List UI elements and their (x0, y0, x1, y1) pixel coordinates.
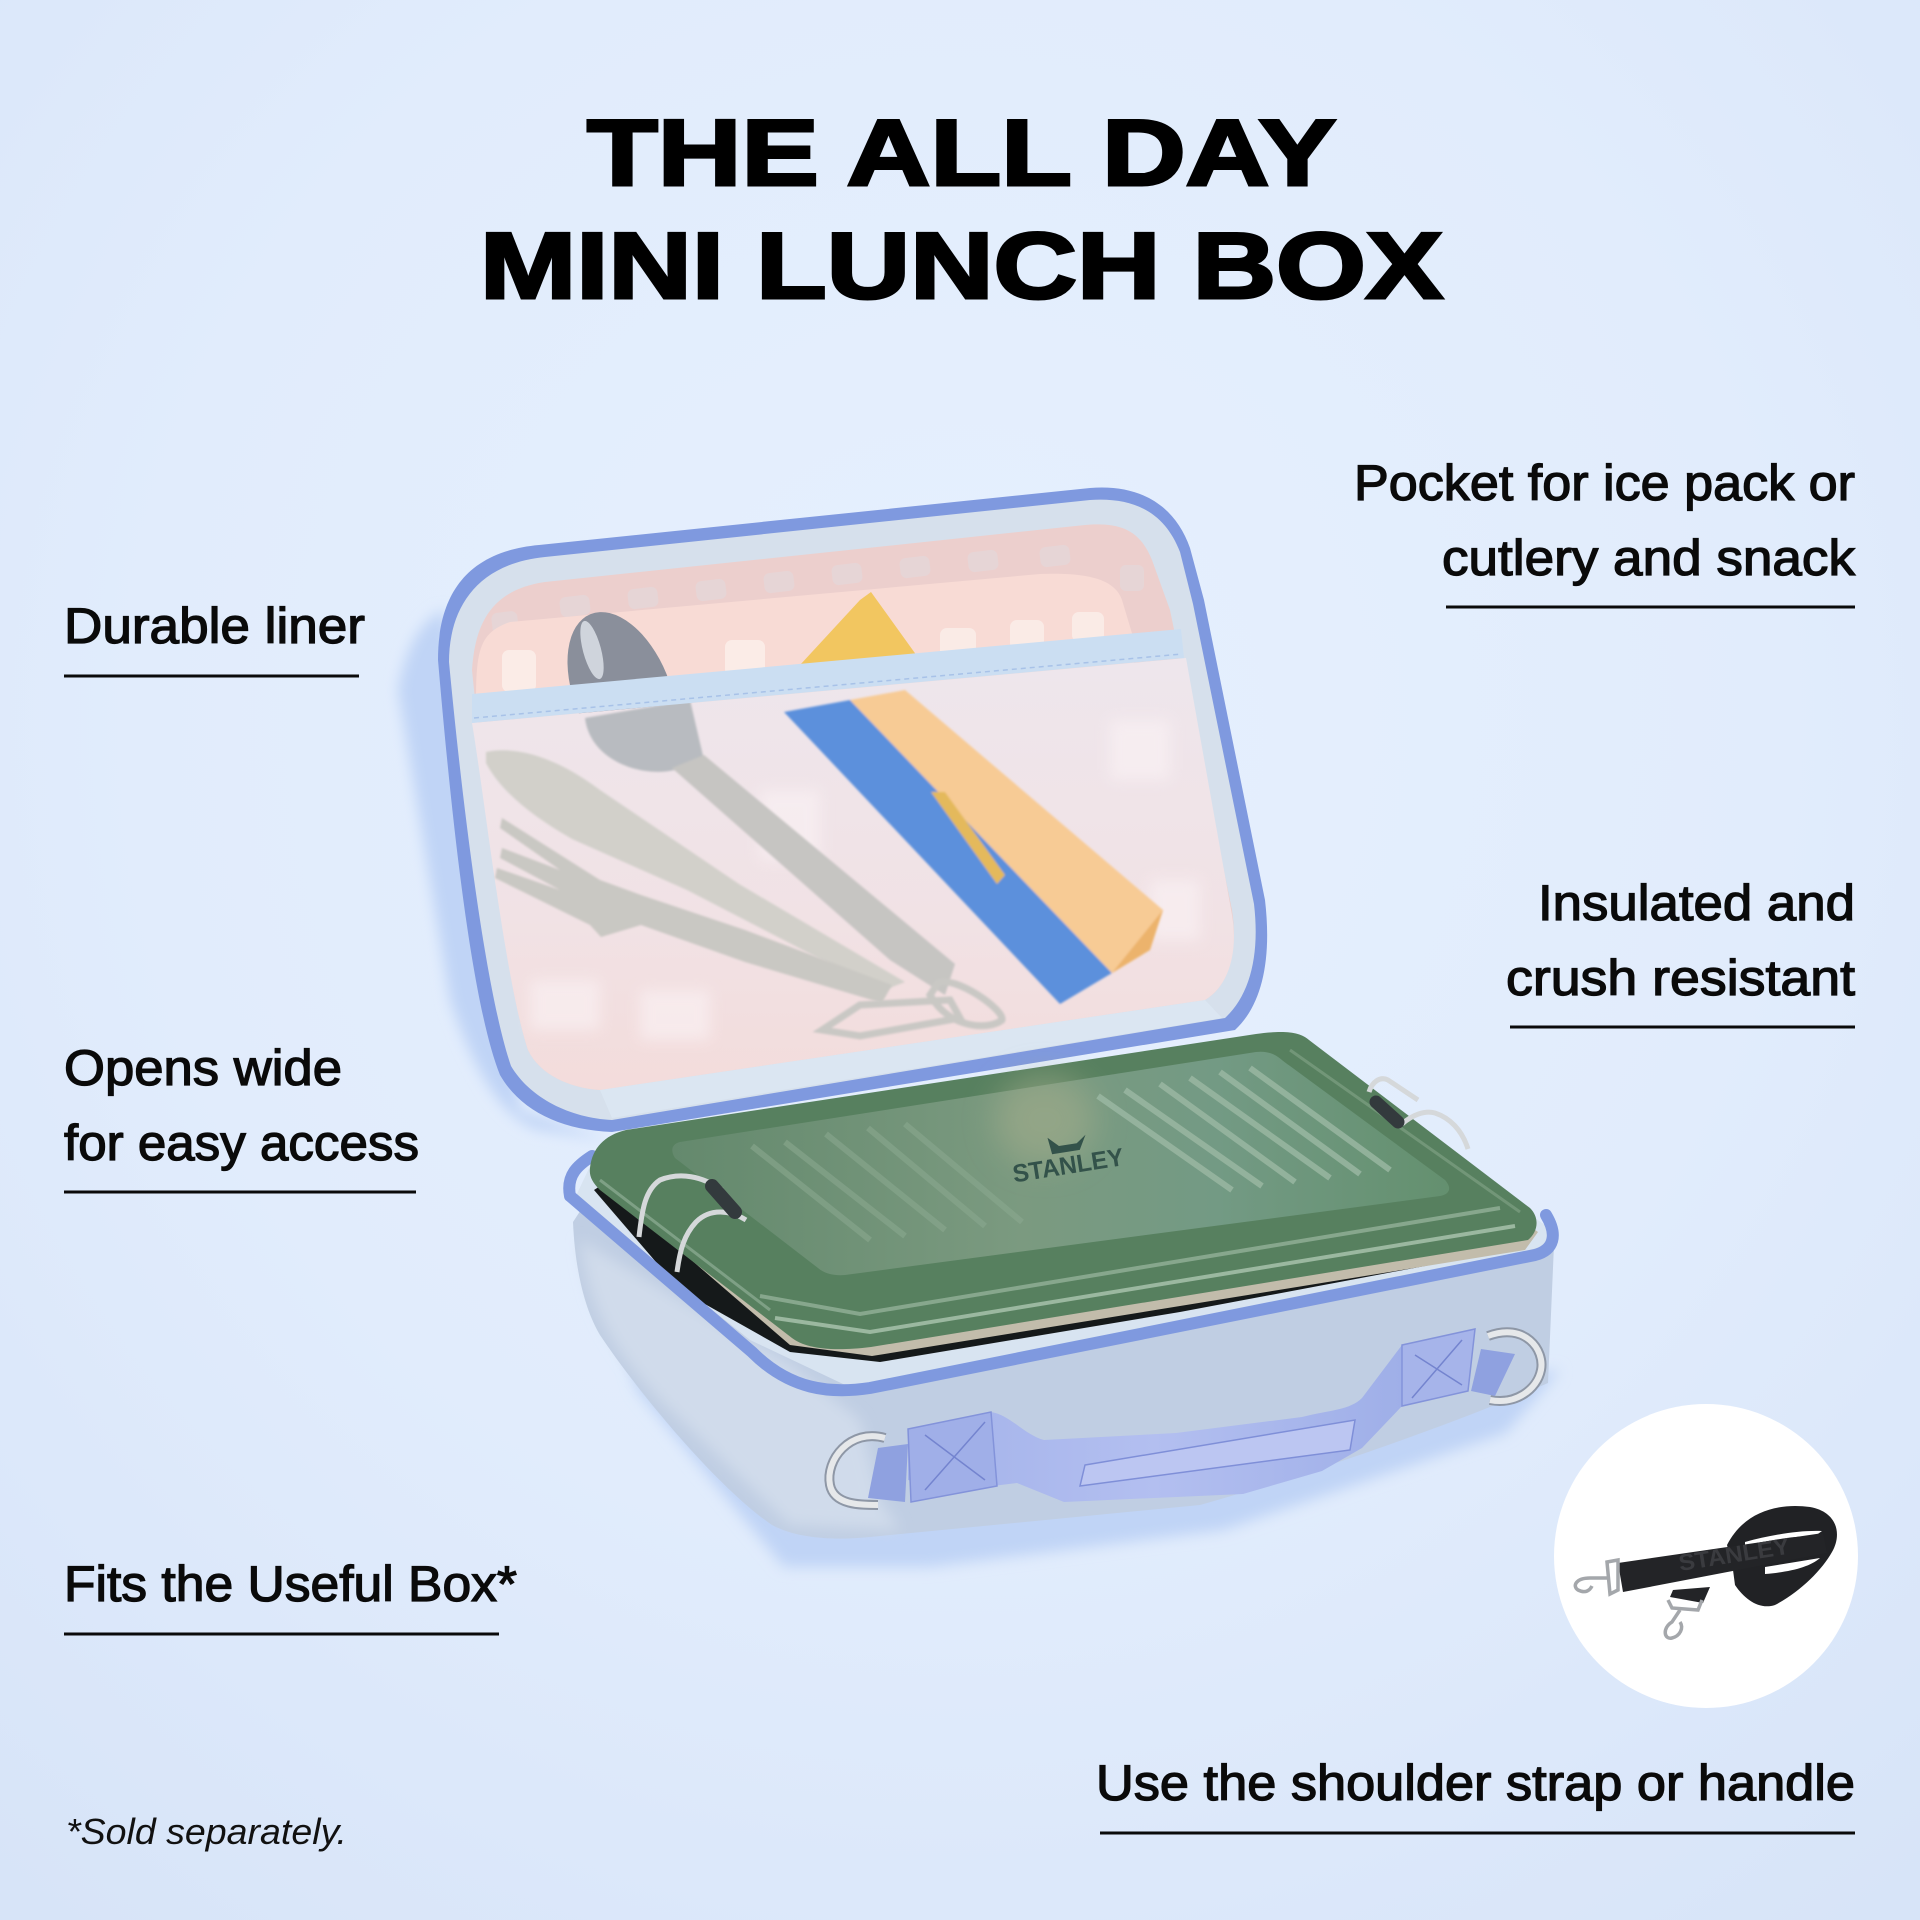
snack bar (784, 690, 1163, 1004)
left patch (908, 1412, 997, 1502)
left tab (868, 1444, 908, 1502)
green useful box (590, 1032, 1538, 1356)
footnote: *Sold separately. (66, 1811, 347, 1852)
clasps (1575, 1560, 1702, 1638)
zipper front (569, 1156, 1553, 1390)
title: MINI LUNCH BOX (480, 213, 1443, 318)
title: THE ALL DAY (587, 100, 1336, 205)
handle fold (1080, 1420, 1355, 1486)
feature: Durable liner: Durable liner (64, 598, 365, 654)
binding shade (600, 1000, 1222, 1118)
lid edge (590, 1032, 1537, 1349)
feature: Opens wide: Opens wide (64, 1040, 342, 1096)
feature: Insulated: crush resistant (1506, 950, 1855, 1006)
right D-ring (1488, 1332, 1542, 1401)
upper lid interior (438, 488, 1267, 1132)
mesh pocket (472, 658, 1234, 1090)
feature: Pocket: Pocket for ice pack or (1354, 455, 1855, 511)
handle strap (908, 1345, 1402, 1502)
feature: Insulated (1506, 875, 1855, 1027)
panel sheen (995, 1075, 1095, 1165)
strap band (1618, 1533, 1827, 1592)
feature: Opens wide (64, 1040, 419, 1192)
tray pattern (502, 612, 1104, 692)
second tab (1670, 1587, 1710, 1603)
logo: STANLEY (1011, 1143, 1126, 1188)
side shading (580, 1240, 900, 1530)
right tab (1471, 1349, 1515, 1396)
mesh highlights (530, 720, 1200, 1040)
title (480, 100, 1443, 318)
lower body (569, 1040, 1554, 1539)
right ribs (1098, 1068, 1390, 1190)
metal base (610, 1060, 1538, 1356)
drop shadow (398, 610, 1560, 1567)
loop openings (1745, 1531, 1822, 1574)
spoon lower (585, 700, 955, 995)
product: open lunch box (398, 488, 1560, 1567)
shell (573, 1060, 1554, 1539)
wire clips left (639, 1176, 746, 1272)
fork (495, 818, 892, 1003)
feature: Fits the Useful Box: Fits the Useful Box* (64, 1556, 517, 1612)
pink liner (472, 524, 1234, 1090)
zipper (438, 488, 1267, 1132)
tray (476, 574, 1134, 720)
feature: shoulder strap: Use the shoulder strap or handle (1096, 1755, 1855, 1811)
knife (486, 750, 905, 991)
top panel (672, 1052, 1449, 1275)
lid ribs highlights (600, 1050, 1520, 1332)
binding (449, 500, 1256, 1120)
feature: Insulated: Insulated and (1538, 875, 1855, 931)
feature: Pocket (1354, 455, 1856, 607)
left D-ring (829, 1436, 885, 1505)
spoon bowl (546, 596, 698, 788)
handle and D-rings (829, 1329, 1542, 1505)
shoulder strap inset: STANLEY (1677, 1533, 1791, 1576)
feature: Opens wide: for easy access (64, 1115, 419, 1171)
carabiner (822, 982, 1002, 1036)
inner black gap (594, 1080, 1510, 1362)
pocket band (472, 629, 1184, 723)
right patch (1402, 1329, 1475, 1406)
liner bear pattern (491, 544, 1144, 636)
wire clips right (1369, 1079, 1468, 1149)
feature: Pocket: cutlery and snack (1442, 530, 1856, 586)
left ribs (752, 1124, 1022, 1240)
snack top (800, 592, 917, 665)
inner rim (574, 1040, 1552, 1392)
strap loop (1727, 1506, 1837, 1606)
shoulder strap inset (1554, 1404, 1858, 1708)
